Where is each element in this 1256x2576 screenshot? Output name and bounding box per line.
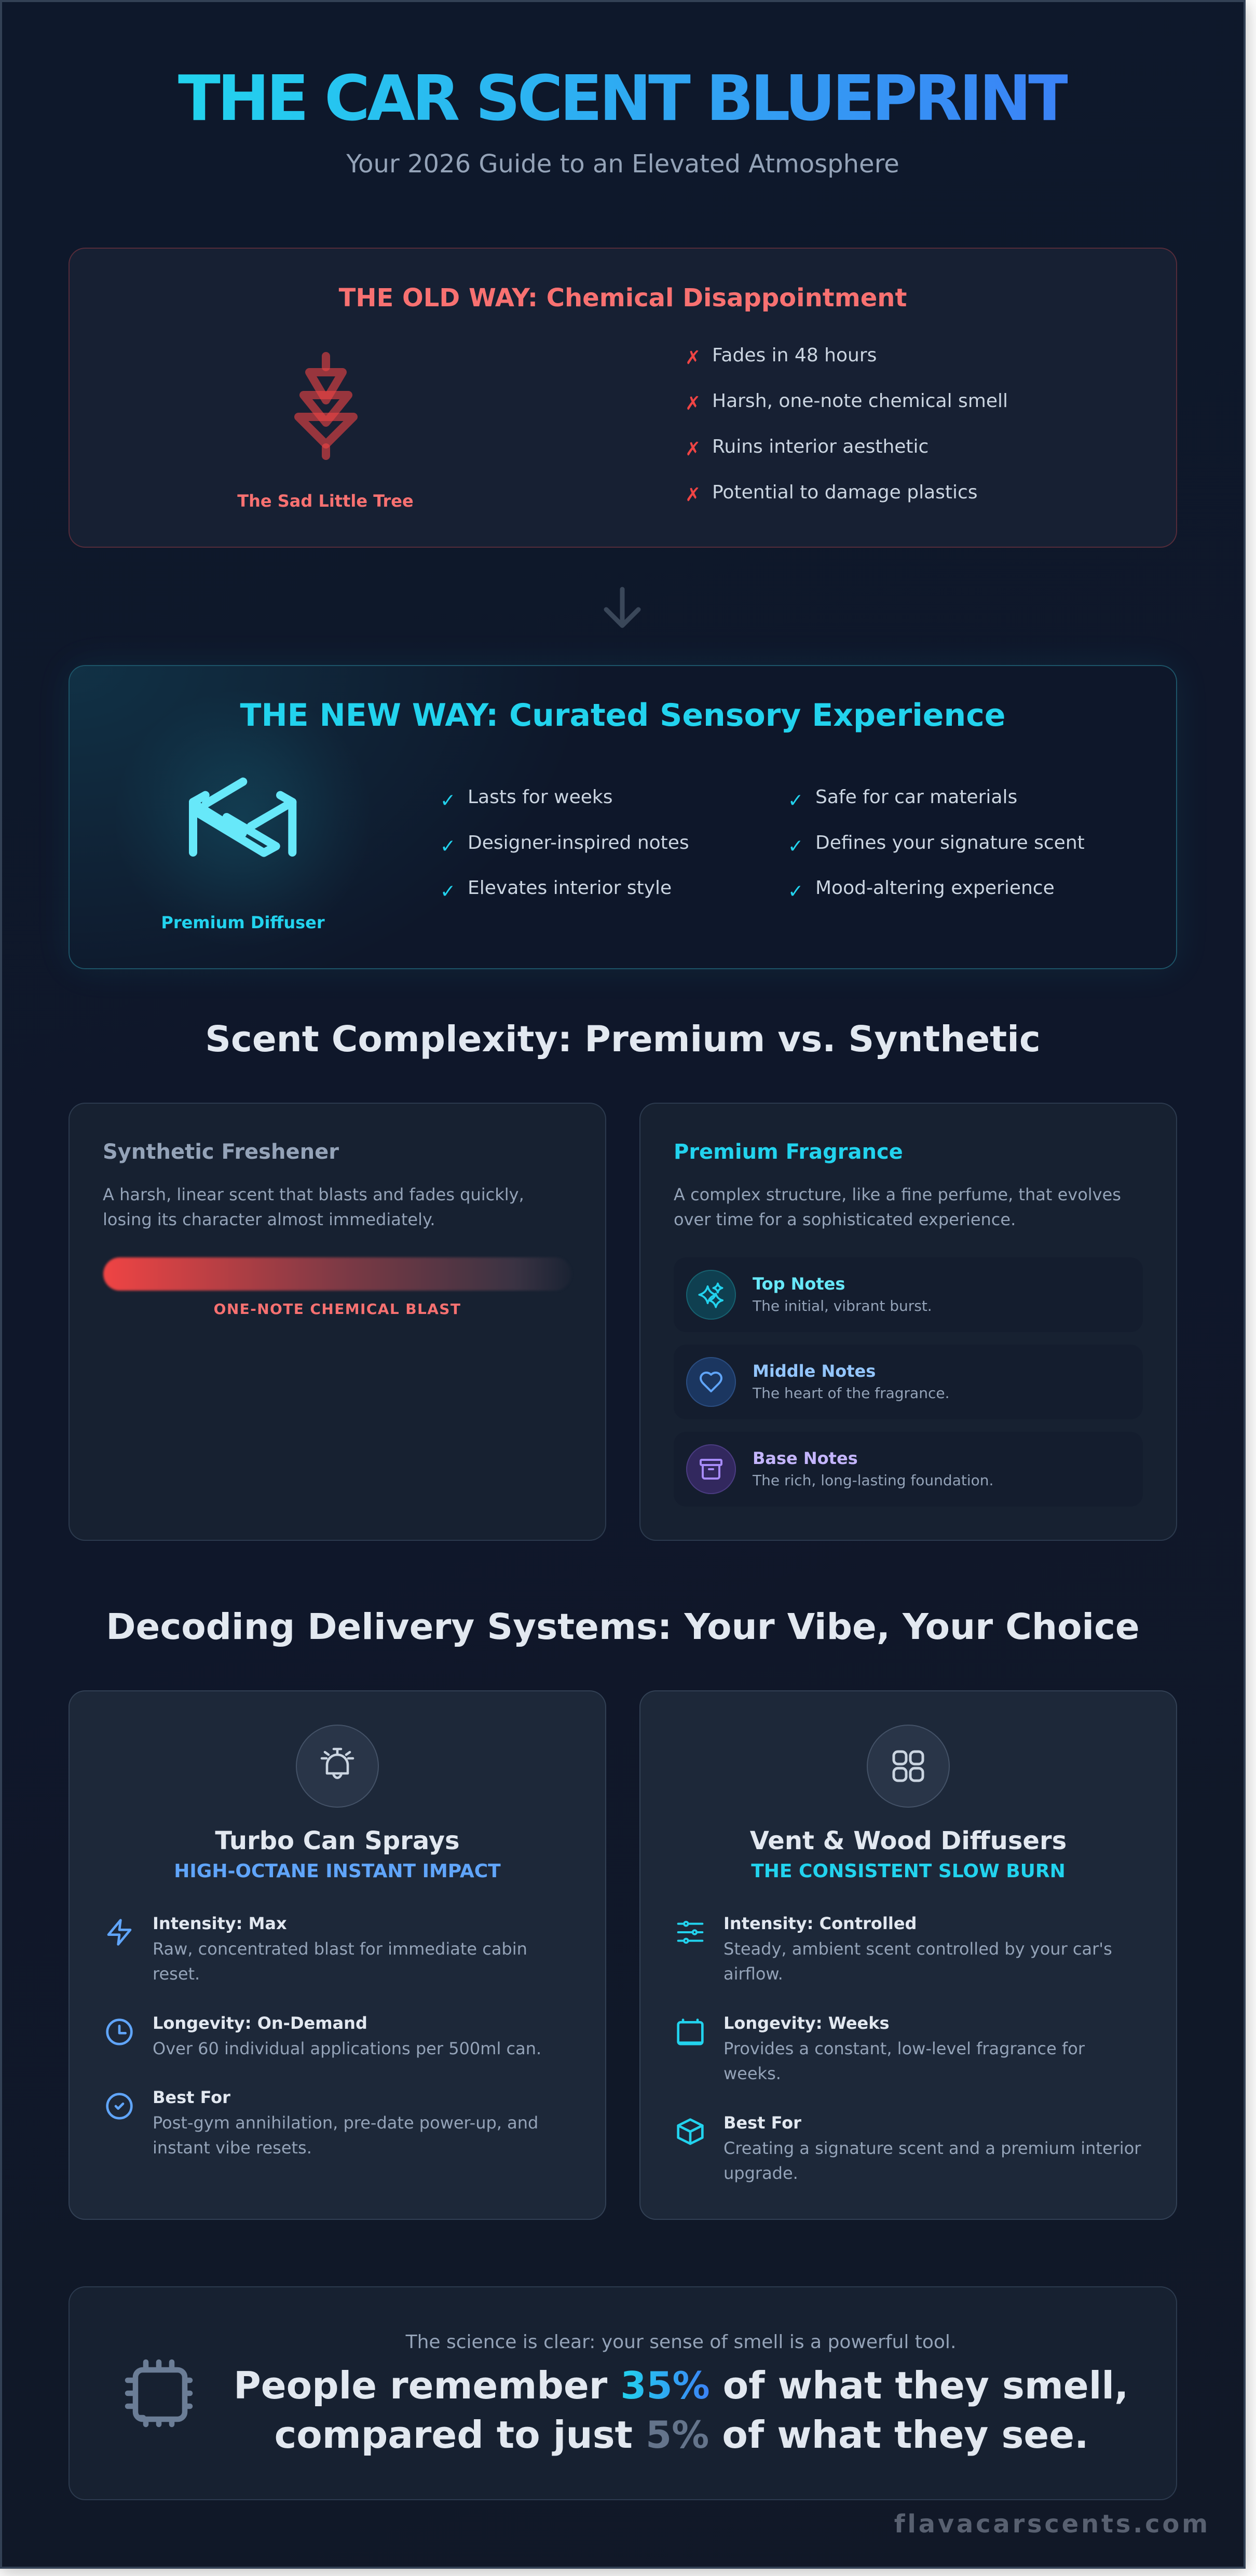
list: new way benefits: Defines your signature scent xyxy=(815,832,1085,853)
icon: alarm bell xyxy=(296,1725,379,1808)
list: new way benefits: Safe for car materials xyxy=(815,787,1017,808)
card title: Synthetic Freshener xyxy=(103,1140,339,1164)
icon label: the sad little tree: The Sad Little Tree xyxy=(237,491,414,511)
list: old way drawbacks xyxy=(685,345,1008,506)
item text: Post-gym annihilation, pre-date power-up, and xyxy=(153,2113,538,2133)
list: new way benefits: Designer-inspired notes xyxy=(468,832,689,853)
icon: cpu chip xyxy=(122,2357,195,2430)
card title: Vent & Wood Diffusers xyxy=(750,1826,1067,1855)
icon: sad little tree xyxy=(294,352,358,460)
title: THE CAR SCENT BLUEPRINT xyxy=(178,63,1068,135)
note description: The initial, vibrant burst. xyxy=(753,1297,932,1314)
item text: reset. xyxy=(153,1964,200,1984)
panel: the new way xyxy=(69,665,1177,969)
panel: science callout xyxy=(69,2286,1177,2500)
note row: top notes xyxy=(674,1257,1143,1332)
icon label: premium diffuser: Premium Diffuser xyxy=(161,913,325,932)
list: new way benefits: ✓ xyxy=(788,881,803,902)
item title: Best For xyxy=(723,2113,801,2133)
list: old way drawbacks: Potential to damage plastics xyxy=(712,482,978,503)
item text: instant vibe resets. xyxy=(153,2138,312,2158)
icon glow xyxy=(113,688,373,948)
panel: vent and wood diffusers xyxy=(639,1690,1177,2220)
callout statistic: People remember 35% of what they smell, xyxy=(234,2364,1128,2407)
list: old way drawbacks: ✗ xyxy=(685,393,701,414)
list: new way benefits: ✓ xyxy=(788,790,803,811)
item title: Longevity: On-Demand xyxy=(153,2013,367,2033)
item text: weeks. xyxy=(723,2064,781,2083)
item text xyxy=(723,1936,1112,1986)
item text xyxy=(723,2136,1141,2186)
note title: Base Notes xyxy=(753,1448,858,1468)
note row: middle notes xyxy=(674,1345,1143,1419)
card subtitle: HIGH-OCTANE INSTANT IMPACT xyxy=(174,1861,501,1882)
icon: heart xyxy=(686,1357,736,1407)
icon: calendar xyxy=(676,2017,705,2046)
item title: Longevity: Weeks xyxy=(723,2013,890,2033)
item text: Provides a constant, low-level fragrance for xyxy=(723,2039,1085,2058)
callout intro: The science is clear: your sense of smell is a powerful tool. xyxy=(406,2331,956,2353)
list: old way drawbacks: Harsh, one-note chemical smell xyxy=(712,390,1008,412)
item title: Best For xyxy=(153,2087,230,2107)
icon: clock xyxy=(106,2018,133,2045)
item title: Intensity: Max xyxy=(153,1914,287,1933)
icon: check circle xyxy=(106,2093,133,2120)
arrow: old way to new way xyxy=(604,587,640,628)
item: longevity xyxy=(674,2013,1143,2091)
card description: over time for a sophisticated experience. xyxy=(674,1210,1016,1229)
note description: The heart of the fragrance. xyxy=(753,1385,949,1402)
callout statistic: compared to just 5% of what they see. xyxy=(275,2413,1088,2457)
item text: airflow. xyxy=(723,1964,783,1984)
card description xyxy=(103,1185,524,1229)
item: intensity xyxy=(107,1914,527,1984)
item title: Intensity: Controlled xyxy=(723,1914,917,1933)
list: old way drawbacks: ✗ xyxy=(685,439,701,460)
card subtitle: THE CONSISTENT SLOW BURN xyxy=(751,1861,1066,1882)
list: new way benefits: ✓ xyxy=(440,881,456,902)
list: new way benefits: ✓ xyxy=(788,836,803,857)
heading: old way: THE OLD WAY: Chemical Disappointment xyxy=(339,283,907,313)
list: new way benefits: ✓ xyxy=(440,790,456,811)
card description xyxy=(674,1185,1121,1229)
callout text block xyxy=(235,2331,1127,2461)
card title: Premium Fragrance xyxy=(674,1140,903,1164)
list: old way drawbacks: Ruins interior aesthetic xyxy=(712,436,929,457)
note row: base notes xyxy=(674,1432,1143,1507)
list: new way benefits xyxy=(440,787,1085,902)
heading: scent complexity: Scent Complexity: Premium vs. Synthetic xyxy=(205,1019,1041,1060)
list: new way benefits: Elevates interior style xyxy=(468,877,672,899)
heading: delivery systems: Decoding Delivery Systems: Your Vibe, Your Choice xyxy=(106,1606,1140,1648)
heading: new way: THE NEW WAY: Curated Sensory Experience xyxy=(240,697,1005,734)
list: old way drawbacks: Fades in 48 hours xyxy=(712,345,877,366)
item text: Raw, concentrated blast for immediate cabin xyxy=(153,1939,527,1959)
subtitle: Your 2026 Guide to an Elevated Atmosphere xyxy=(346,150,899,179)
footer: website: flavacarscents.com xyxy=(894,2510,1210,2539)
icon: premium diffuser xyxy=(189,778,297,857)
list: new way benefits: Mood-altering experience xyxy=(815,877,1055,899)
item: intensity xyxy=(677,1914,1112,1984)
list: new way benefits: ✓ xyxy=(440,836,456,857)
panel: premium fragrance xyxy=(639,1103,1177,1541)
card description: losing its character almost immediately. xyxy=(103,1210,435,1229)
panel: turbo can sprays xyxy=(69,1690,606,2220)
note title: Top Notes xyxy=(753,1274,845,1294)
icon: sparkles xyxy=(686,1270,736,1320)
item text xyxy=(723,2036,1085,2086)
card description: A harsh, linear scent that blasts and fades quickly, xyxy=(103,1185,524,1204)
item text: Creating a signature scent and a premium interior xyxy=(723,2138,1141,2158)
item text: Steady, ambient scent controlled by your car's xyxy=(723,1939,1112,1959)
icon: four rounded squares xyxy=(867,1725,950,1808)
list: new way benefits: Lasts for weeks xyxy=(468,787,612,808)
bar label: ONE-NOTE CHEMICAL BLAST xyxy=(214,1300,461,1318)
item: best for xyxy=(674,2113,1143,2191)
note title: Middle Notes xyxy=(753,1361,876,1381)
callout statistic xyxy=(234,2361,1126,2460)
icon: cube xyxy=(676,2117,705,2146)
note description: The rich, long-lasting foundation. xyxy=(753,1472,993,1489)
item text xyxy=(153,2113,538,2158)
item: best for xyxy=(106,2087,538,2158)
item text: upgrade. xyxy=(723,2163,798,2183)
item: longevity xyxy=(106,2013,541,2058)
panel: the old way xyxy=(69,248,1177,548)
list: old way drawbacks: ✗ xyxy=(685,347,701,369)
item text xyxy=(153,1939,527,1984)
icon: archive box xyxy=(686,1444,736,1494)
icon: sliders xyxy=(676,1918,705,1947)
card title: Turbo Can Sprays xyxy=(215,1826,460,1855)
list: old way drawbacks: ✗ xyxy=(685,484,701,506)
card description: A complex structure, like a fine perfume, that evolves xyxy=(674,1185,1121,1204)
item text: Over 60 individual applications per 500ml can. xyxy=(153,2039,541,2058)
gradient bar: one-note blast xyxy=(103,1257,571,1291)
icon: lightning xyxy=(107,1919,132,1946)
panel: synthetic freshener xyxy=(69,1103,606,1541)
